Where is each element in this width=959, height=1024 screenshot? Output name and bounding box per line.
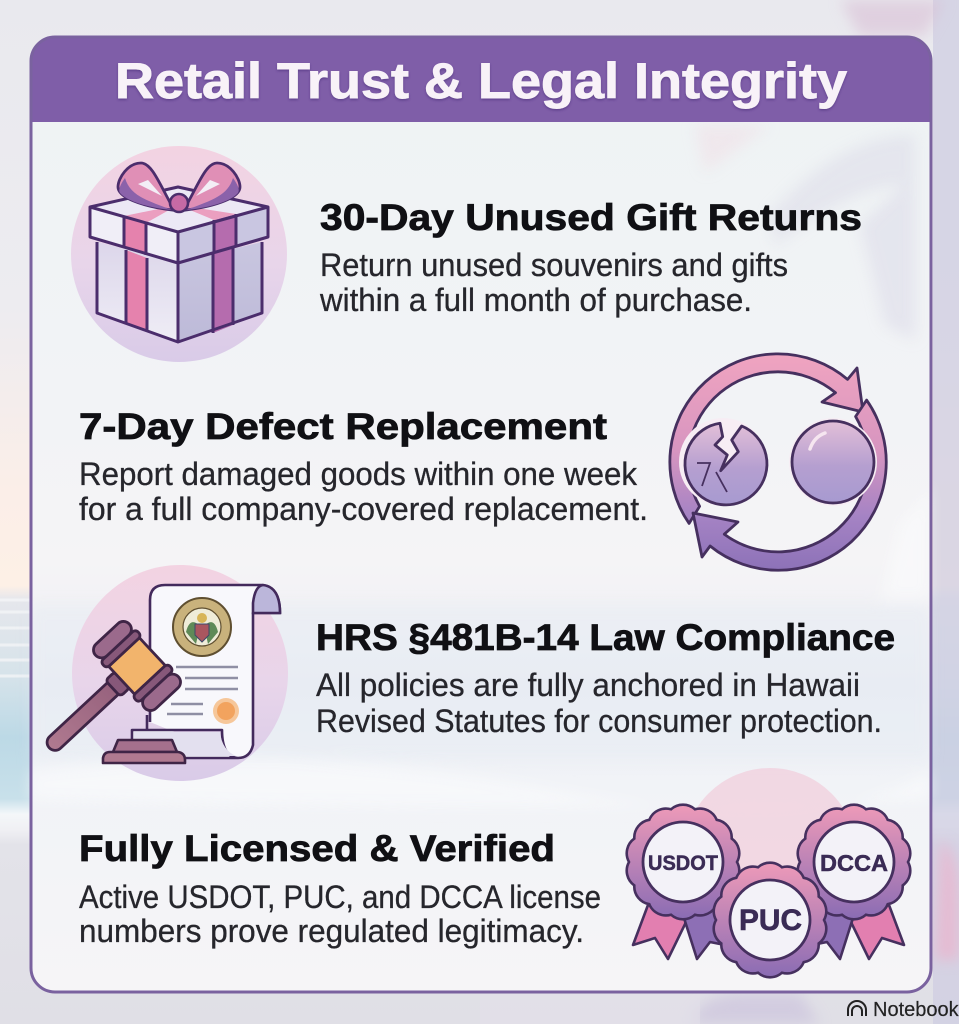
text block: licensed and verified: Active USDOT, PUC, and DCCA license [79, 879, 601, 915]
icon: replacement cycle [670, 354, 886, 570]
arrow: top [670, 354, 863, 523]
text block: 30-day returns: Return unused souvenirs and gifts [320, 247, 788, 283]
arrow: bottom [693, 400, 886, 570]
gavel [19, 617, 185, 780]
text block: licensed and verified: Fully Licensed & Verified [79, 827, 555, 869]
icon: gift box [71, 146, 287, 362]
badge: PUC: PUC [739, 904, 802, 937]
icon: gavel and legal document [19, 565, 288, 781]
text block: 7-day replacement: for a full company-covered replacement. [79, 491, 648, 527]
badge: DCCA: DCCA [820, 850, 888, 876]
text block: HRS compliance [316, 616, 895, 739]
header bar [31, 37, 931, 122]
broken sphere [679, 418, 767, 506]
text block: HRS compliance: HRS §481B-14 Law Compliance [316, 616, 895, 658]
bow [118, 163, 172, 210]
orange seal [213, 698, 239, 724]
text block: 30-day returns: within a full month of purchase. [319, 282, 752, 318]
text block: HRS compliance: All policies are fully anchored in Hawaii [316, 667, 860, 703]
badge: USDOT: USDOT [648, 852, 718, 875]
whole sphere [789, 418, 877, 506]
text block: licensed and verified [79, 827, 601, 949]
text block: HRS compliance: Revised Statutes for consumer protection. [316, 703, 882, 739]
text block: 7-day replacement: Report damaged goods within one week [79, 456, 638, 492]
sound block [103, 715, 185, 763]
watermark: NotebookLM: Notebook [873, 999, 959, 1021]
document lines [167, 667, 238, 714]
text block: 30-day returns [319, 196, 862, 318]
badge: USDOT [627, 805, 739, 959]
text block: 7-day replacement [79, 405, 648, 527]
text block: 30-day returns: 30-Day Unused Gift Returns [320, 196, 862, 238]
icon: license badges [627, 768, 910, 977]
title: Retail Trust & Legal Integrity [115, 53, 847, 109]
scroll document [132, 585, 280, 758]
badge: PUC [714, 863, 826, 977]
state seal [173, 598, 231, 656]
text block: licensed and verified: numbers prove regulated legitimacy. [79, 913, 584, 949]
text block: 7-day replacement: 7-Day Defect Replacement [79, 405, 608, 447]
faded palm fronds [30, 125, 930, 811]
badge: DCCA [798, 805, 910, 959]
